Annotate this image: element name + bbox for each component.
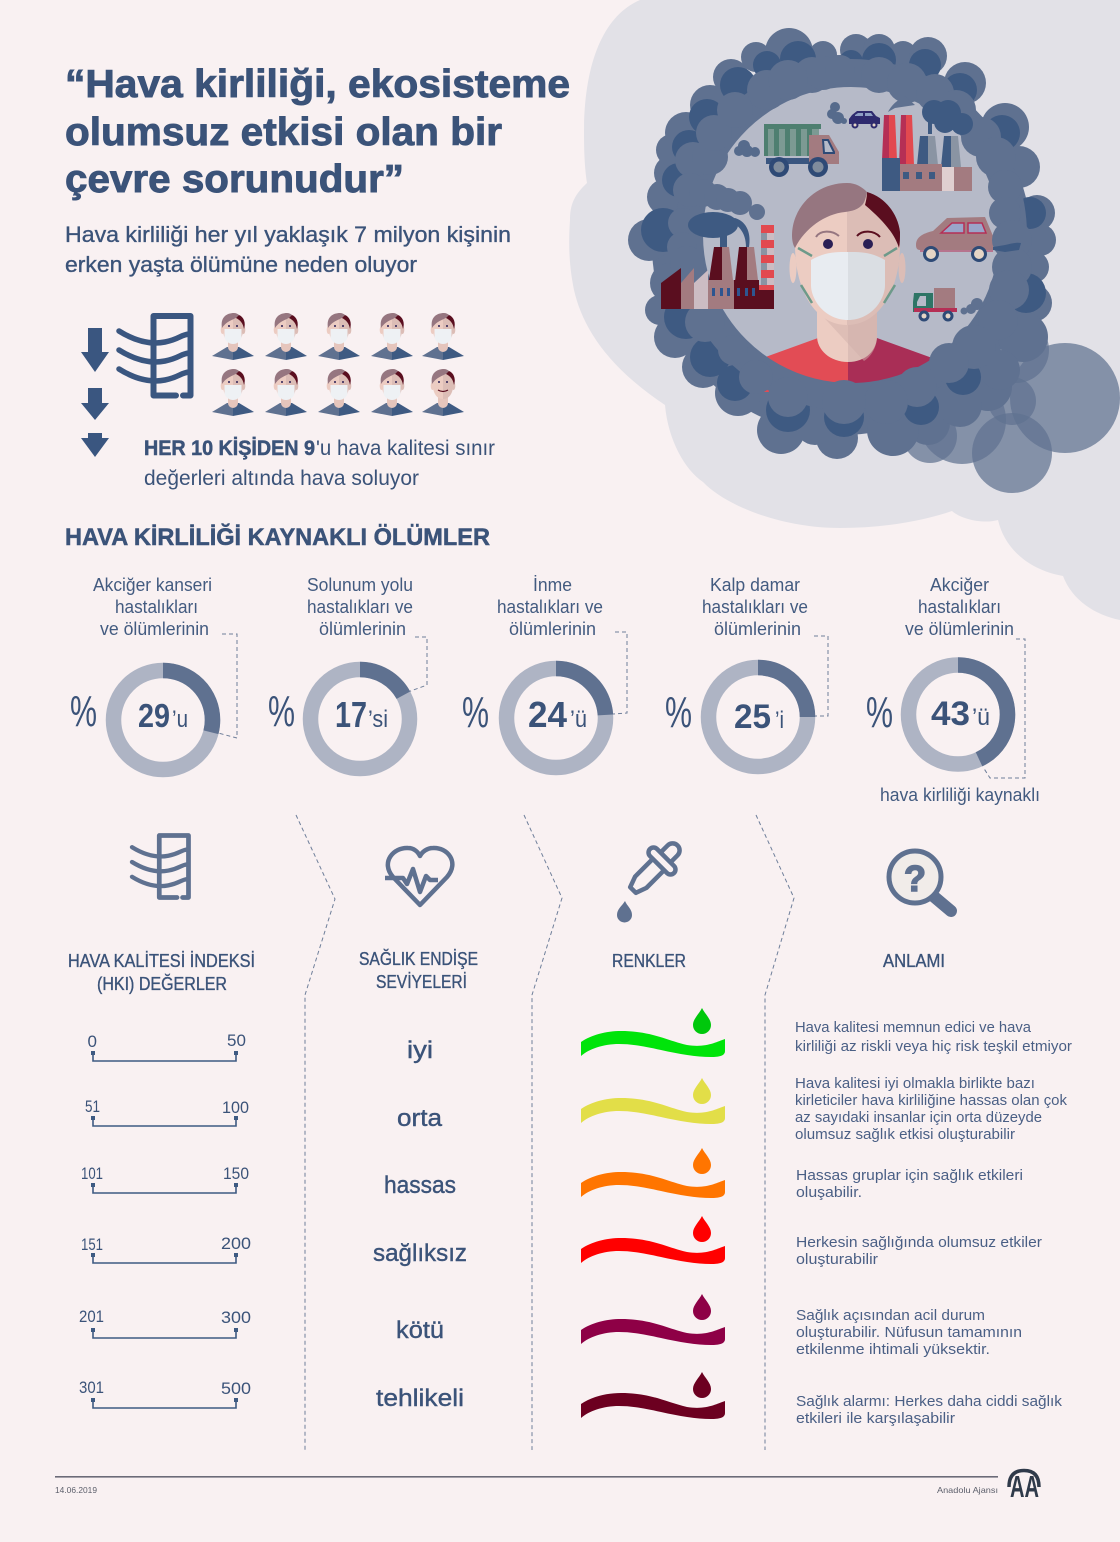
- scale bars: 300: [221, 1308, 251, 1327]
- footer: [55, 1469, 1039, 1504]
- levels: iyi: [407, 1037, 433, 1064]
- meaning text: good: kirliliği az riskli veya hiç risk teşkil etmiyor: [795, 1038, 1072, 1055]
- smoke ring illustration: [628, 28, 1056, 459]
- small truck: [913, 288, 957, 322]
- scale bars: 100: [222, 1098, 249, 1117]
- donut: stroke 24: İnme: [533, 575, 572, 595]
- meaning text: bad: [796, 1307, 1022, 1358]
- meaning text: unhealthy: [796, 1234, 1042, 1268]
- icon: building with wind: [119, 316, 190, 396]
- small car with exhaust: [827, 102, 880, 128]
- truck: [764, 124, 839, 177]
- heading: health: SEVİYELERİ: [376, 972, 467, 992]
- scale bars: 200: [221, 1234, 251, 1253]
- heading: meaning: ANLAMI: [883, 951, 945, 971]
- meaning text: moderate: Hava kalitesi iyi olmakla birlikte bazı: [795, 1075, 1035, 1092]
- donut: lung 43: hava kirliliği kaynaklı: [880, 785, 1040, 805]
- donut: lung 43: [866, 575, 1040, 805]
- left factory smoke: [667, 173, 765, 280]
- statistic text: değerleri altında hava soluyor: [144, 467, 419, 490]
- title: “Hava kirliliği, ekosisteme: [65, 63, 570, 106]
- logo: AA: [1009, 1469, 1039, 1504]
- donut: lung cancer 29: [70, 575, 237, 770]
- meaning text: unhealthy: Herkesin sağlığında olumsuz etkiler: [796, 1234, 1042, 1251]
- donut: respiratory 17: [268, 575, 427, 768]
- heading: AQI: [68, 951, 255, 994]
- exhaust and factory smoke: [922, 100, 1021, 252]
- meaning text: moderate: az sayıdaki insanlar için orta düzeyde: [795, 1109, 1042, 1126]
- scale bars: 50: [227, 1031, 246, 1050]
- icon: dropper: [617, 833, 690, 923]
- meaning text: sensitive: [796, 1167, 1023, 1201]
- heading: colours: RENKLER: [612, 951, 686, 971]
- scale bars: 150: [223, 1164, 249, 1183]
- donut: lung cancer 29: ’u: [172, 706, 188, 733]
- mask: [811, 252, 848, 320]
- donut: respiratory 17: ölümlerinin: [319, 619, 406, 639]
- statistic text: 'u hava kalitesi sınır: [316, 437, 495, 460]
- inner smoke ring: [675, 55, 1032, 424]
- meaning text: unhealthy: oluşturabilir: [796, 1251, 878, 1268]
- meaning text: moderate: olumsuz sağlık etkisi oluşturabilir: [795, 1126, 1015, 1143]
- donut: lung cancer 29: Akciğer kanseri: [93, 575, 212, 595]
- donut: lung cancer 29: 29: [138, 697, 170, 734]
- donut: heart 25: ölümlerinin: [714, 619, 801, 639]
- donut: stroke 24: ölümlerinin: [509, 619, 596, 639]
- meaning text: sensitive: Hassas gruplar için sağlık etkileri: [796, 1167, 1023, 1184]
- column: AQI values: [68, 835, 255, 1408]
- background smoke cloud: [569, 0, 1120, 620]
- shirt: [760, 338, 848, 392]
- hair: [792, 183, 867, 248]
- donut: respiratory 17: 17: [335, 694, 367, 735]
- icon: magnifier with question mark: [889, 851, 951, 911]
- title: [65, 63, 570, 201]
- meaning text: good: Hava kalitesi memnun edici ve hava: [795, 1019, 1032, 1036]
- icon: building: [132, 835, 188, 897]
- translucent smoke circles: [903, 317, 1120, 493]
- heading: AQI: (HKI) DEĞERLER: [97, 973, 227, 994]
- donut: respiratory 17: Solunum yolu: [307, 575, 413, 595]
- donut: stroke 24: 24: [528, 694, 567, 735]
- meaning text: moderate: [795, 1075, 1067, 1143]
- people grid: 9 of 10 masked: [212, 313, 464, 416]
- donut: heart 25: 25: [734, 698, 771, 736]
- donut: lung cancer 29: ve ölümlerinin: [100, 619, 209, 639]
- meaning text: hazardous: Sağlık alarmı: Herkes daha ciddi sağlık: [796, 1393, 1063, 1410]
- meaning text: moderate: kirleticiler hava kirliliğine hassas olan çok: [795, 1092, 1067, 1109]
- section heading: HAVA KİRLİLİĞİ KAYNAKLI ÖLÜMLER: [65, 523, 490, 551]
- scale bars: 51: [85, 1097, 100, 1116]
- subtitle: Hava kirliliği her yıl yaklaşık 7 milyon kişinin: [65, 222, 511, 247]
- donut: lung 43: 43: [931, 695, 970, 733]
- donut: respiratory 17: ’si: [368, 706, 388, 733]
- left factory: [661, 225, 774, 309]
- donut: lung cancer 29: %: [70, 687, 97, 736]
- donut: lung 43: ’ü: [972, 704, 990, 731]
- donut: stroke 24: %: [462, 688, 489, 737]
- icon: heart with pulse: [385, 848, 452, 905]
- donut: stroke 24: hastalıkları ve: [497, 597, 603, 617]
- donut: stroke 24: ’ü: [570, 706, 587, 733]
- subtitle: erken yaşta ölümüne neden oluyor: [65, 252, 417, 277]
- meaning text: sensitive: oluşabilir.: [796, 1184, 862, 1201]
- scale bars: 0: [88, 1032, 97, 1051]
- donut: lung 43: Akciğer: [930, 575, 989, 595]
- donut: lung 43: hastalıkları: [918, 597, 1001, 617]
- neck: [817, 300, 848, 362]
- donut: heart 25: ’i: [775, 707, 784, 734]
- heading: AQI: HAVA KALİTESİ İNDEKSİ: [68, 951, 255, 971]
- meaning text: bad: etkilenme ihtimali yüksektir.: [796, 1341, 990, 1358]
- column: meaning: [795, 851, 1072, 1427]
- heading: health: SAĞLIK ENDİŞE: [359, 948, 478, 969]
- donut: stroke 24: [462, 575, 627, 768]
- face: [790, 253, 796, 283]
- outer smoke ring: [628, 28, 1056, 459]
- right factory: [882, 115, 972, 191]
- meaning text: bad: Sağlık açısından acil durum: [796, 1307, 985, 1324]
- scale bars: 201: [79, 1307, 104, 1326]
- eyes and brows: [823, 239, 833, 249]
- title: çevre sorunudur”: [65, 158, 404, 201]
- car: [916, 217, 993, 262]
- statistic text: [144, 437, 495, 490]
- donut: lung 43: ve ölümlerinin: [905, 619, 1014, 639]
- scale bars: [79, 1031, 251, 1408]
- inner sky disc: [689, 73, 1013, 397]
- scale bars: 301: [79, 1378, 104, 1397]
- levels: tehlikeli: [376, 1385, 464, 1412]
- levels: orta: [397, 1105, 443, 1132]
- levels: [373, 1037, 467, 1412]
- heading: health: [359, 948, 478, 992]
- meaning text: good: [795, 1019, 1072, 1055]
- levels: kötü: [396, 1317, 444, 1344]
- donut: heart 25: Kalp damar: [710, 575, 800, 595]
- donut: respiratory 17: hastalıkları ve: [307, 597, 413, 617]
- meaning text: hazardous: etkileri ile karşılaşabilir: [796, 1410, 955, 1427]
- colour ribbons: [581, 1008, 725, 1419]
- icon: magnifier with question mark: ?: [904, 858, 926, 899]
- column: health concern: [359, 848, 478, 1412]
- statistic text: HER 10 KİŞİDEN 9: [144, 437, 315, 460]
- donut: lung cancer 29: hastalıkları: [115, 597, 198, 617]
- footer: Anadolu Ajansı: [937, 1485, 998, 1495]
- donut: respiratory 17: %: [268, 687, 295, 736]
- footer: 14.06.2019: [55, 1485, 97, 1495]
- column: colours: [581, 833, 725, 1419]
- meaning text: bad: oluşturabilir. Nüfusun tamamının: [796, 1324, 1022, 1341]
- person with mask: [760, 183, 935, 392]
- subtitle: [65, 222, 511, 277]
- donut: heart 25: hastalıkları ve: [702, 597, 808, 617]
- scale bars: 500: [221, 1379, 251, 1398]
- levels: sağlıksız: [373, 1240, 467, 1267]
- donut: lung 43: %: [866, 688, 893, 737]
- straps: [798, 248, 897, 303]
- donut: heart 25: %: [665, 688, 692, 737]
- icon: down arrows: [81, 328, 109, 457]
- donut: heart 25: [665, 575, 828, 766]
- scale bars: 101: [81, 1164, 103, 1183]
- scale bars: 151: [81, 1235, 103, 1254]
- middle smoke ring: [641, 41, 1046, 437]
- meaning text: hazardous: [796, 1393, 1063, 1427]
- logo: AA: AA: [1010, 1469, 1039, 1504]
- small smoke cloud: [734, 140, 760, 157]
- title: olumsuz etkisi olan bir: [65, 111, 502, 154]
- levels: hassas: [384, 1172, 456, 1199]
